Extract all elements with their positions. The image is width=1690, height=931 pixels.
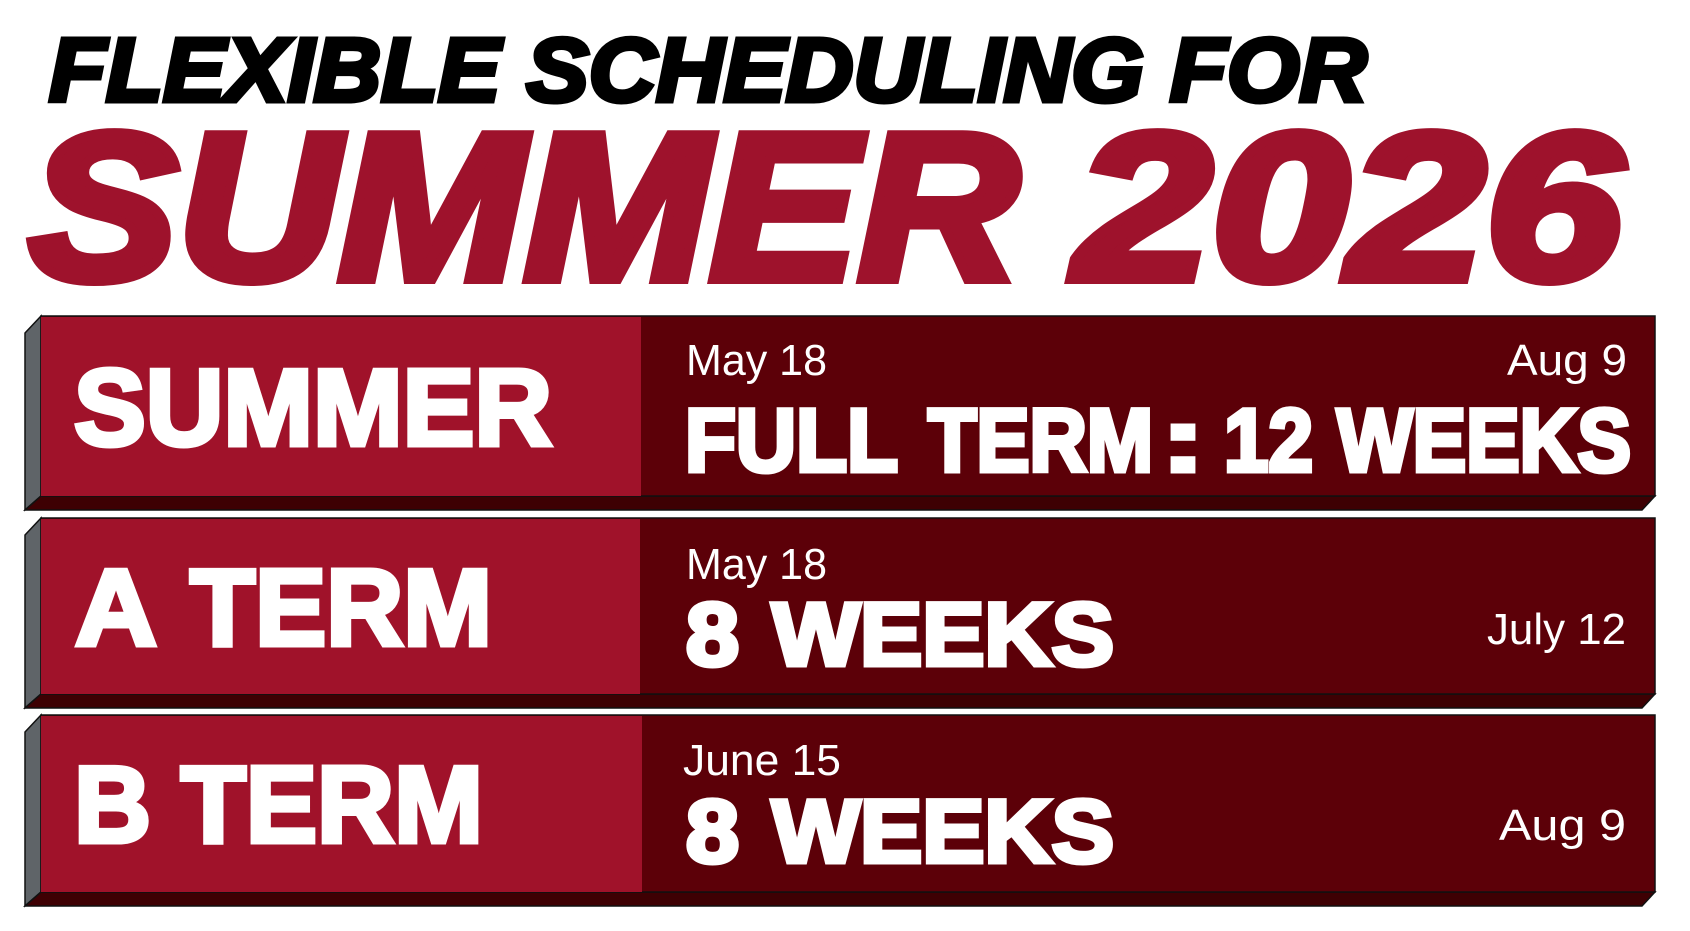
term name: A (75, 547, 157, 669)
title word: summer: SUMMER (29, 91, 1019, 324)
end date: July 12 (1487, 605, 1626, 654)
duration: 8 (686, 781, 739, 881)
right date panel (41, 316, 1655, 496)
panel: b term (25, 715, 1655, 906)
term name: TERM (190, 547, 492, 669)
start date: May 18 (686, 336, 827, 385)
term name: B TERM (74, 744, 483, 866)
bottom bevel (25, 892, 1655, 906)
duration: 12 (1224, 390, 1313, 490)
bottom bevel (25, 694, 1655, 708)
right date panel (41, 715, 1655, 892)
duration: : (1162, 390, 1204, 490)
panel: summer full term (25, 316, 1655, 510)
end date: Aug 9 (1499, 801, 1626, 850)
duration: WEEKS (772, 781, 1114, 881)
title year: 2026: 2026 (1070, 91, 1624, 324)
left name panel (41, 317, 641, 496)
left name panel (41, 716, 642, 892)
left bevel (25, 518, 41, 708)
right date panel (41, 518, 1655, 694)
duration: 8 (686, 584, 739, 684)
duration: FULL (685, 390, 898, 490)
left name panel (41, 519, 640, 694)
start date: June 15 (683, 736, 841, 785)
duration: WEEKS (1337, 390, 1631, 490)
duration (685, 390, 1631, 490)
bottom bevel (25, 496, 1655, 510)
left bevel (25, 316, 41, 510)
duration: TERM (928, 390, 1153, 490)
duration: WEEKS (772, 584, 1114, 684)
panel: a term (25, 518, 1655, 708)
start date: May 18 (686, 540, 827, 589)
term name: SUMMER (74, 347, 552, 469)
title line: flexible scheduling for: FLEXIBLE SCHEDULING FOR (49, 21, 1367, 121)
left bevel (25, 715, 41, 906)
end date: Aug 9 (1507, 336, 1627, 385)
